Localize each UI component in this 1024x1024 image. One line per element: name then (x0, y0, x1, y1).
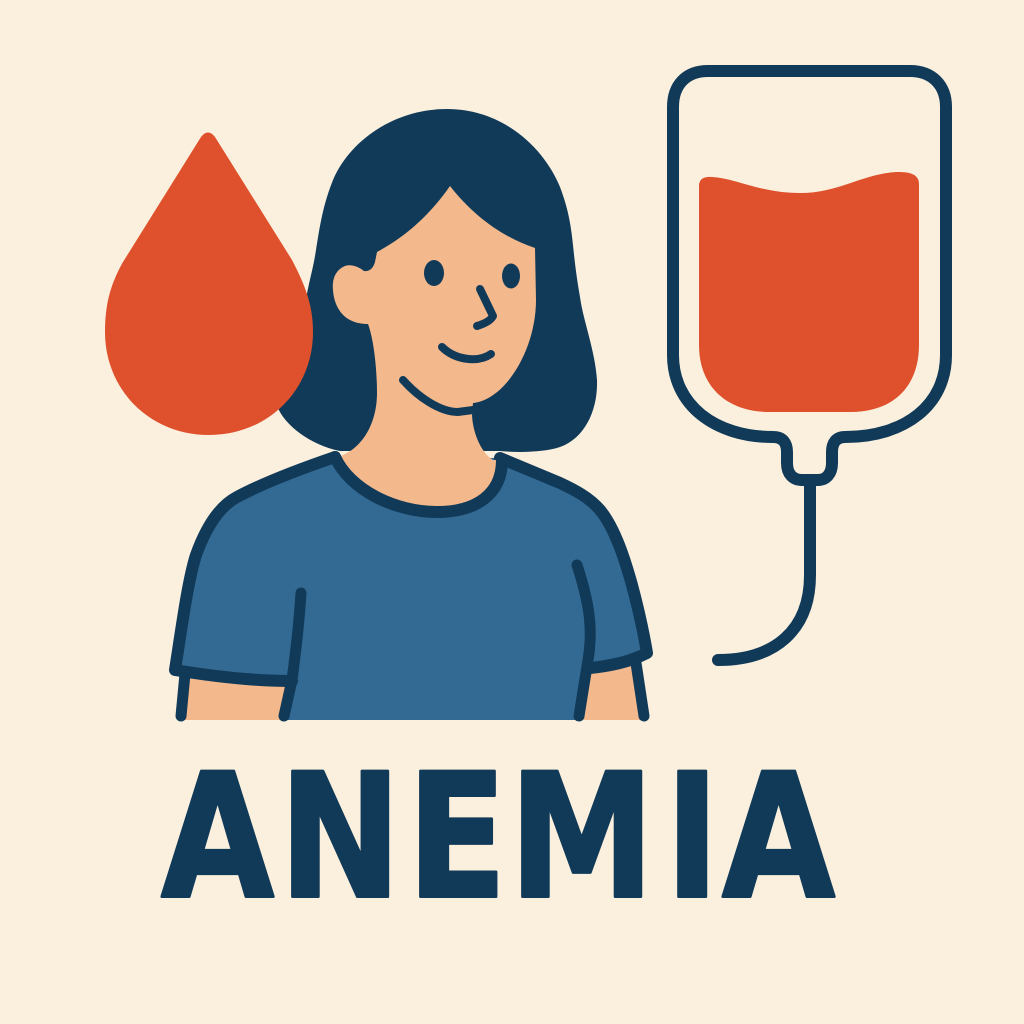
jaw line (403, 380, 473, 412)
nose (477, 289, 493, 326)
arms (181, 660, 644, 720)
bag outline (673, 71, 946, 480)
collar (335, 457, 502, 512)
icon: person (175, 186, 647, 720)
icon: hair back (278, 109, 597, 452)
icon: IV blood bag (673, 71, 946, 660)
shirt (175, 457, 647, 720)
smile (442, 347, 491, 359)
sleeve lines (284, 565, 590, 716)
title: ANEMIA (161, 737, 835, 937)
eyes (424, 260, 520, 288)
face and neck (333, 186, 536, 512)
blood fill (699, 172, 919, 412)
icon: blood drop (105, 132, 313, 435)
tube (718, 480, 810, 660)
